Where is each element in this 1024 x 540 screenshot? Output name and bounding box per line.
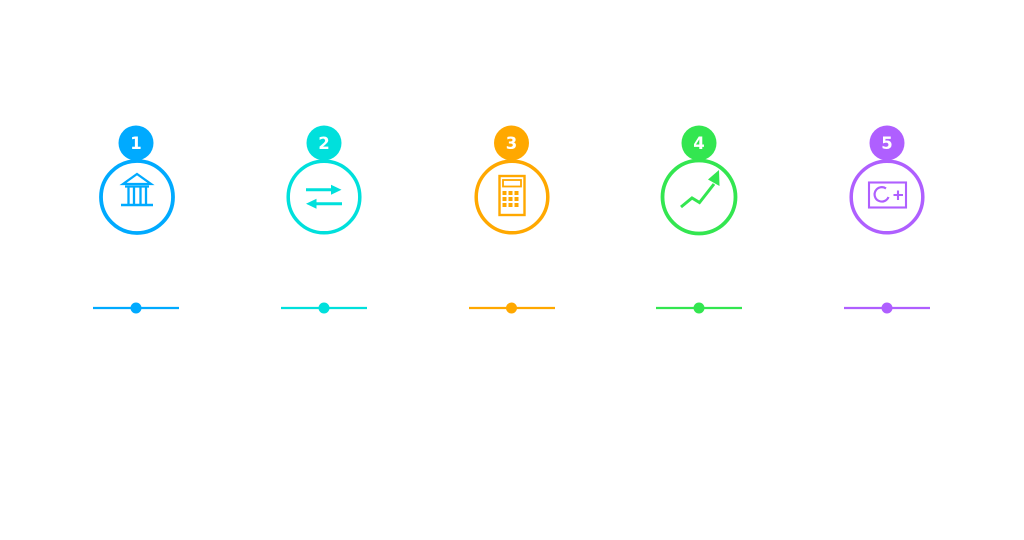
step 2: exchange <box>281 126 367 314</box>
badge 4 <box>682 126 716 160</box>
badge 5 <box>870 126 904 160</box>
step 3: calculator <box>469 126 555 314</box>
slider 3 <box>469 302 555 314</box>
ring 4 <box>662 160 736 234</box>
badge 2: 2 <box>318 134 330 153</box>
badge 5: 5 <box>881 134 893 153</box>
step 5: card <box>844 126 930 314</box>
step 1: bank <box>93 126 179 314</box>
slider 2 <box>281 302 367 314</box>
badge 1: 1 <box>130 134 142 153</box>
slider 4 <box>656 302 742 314</box>
ring 1 <box>101 161 173 233</box>
badge 1 <box>118 126 154 160</box>
step 4: growth <box>656 126 742 314</box>
icon: calculator <box>500 176 524 215</box>
ring 3 <box>476 161 548 233</box>
icon: card with plus <box>869 182 906 208</box>
ring 5 <box>851 161 923 233</box>
icon: exchange arrows <box>306 185 342 209</box>
badge 3: 3 <box>506 134 517 153</box>
icon: growth arrow <box>681 170 720 207</box>
icon: bank building <box>121 174 153 205</box>
slider 1 <box>93 302 179 314</box>
badge 2 <box>306 126 342 160</box>
badge 4: 4 <box>693 134 705 153</box>
badge 3 <box>494 126 529 160</box>
slider 5 <box>844 302 930 314</box>
ring 2 <box>288 161 360 233</box>
